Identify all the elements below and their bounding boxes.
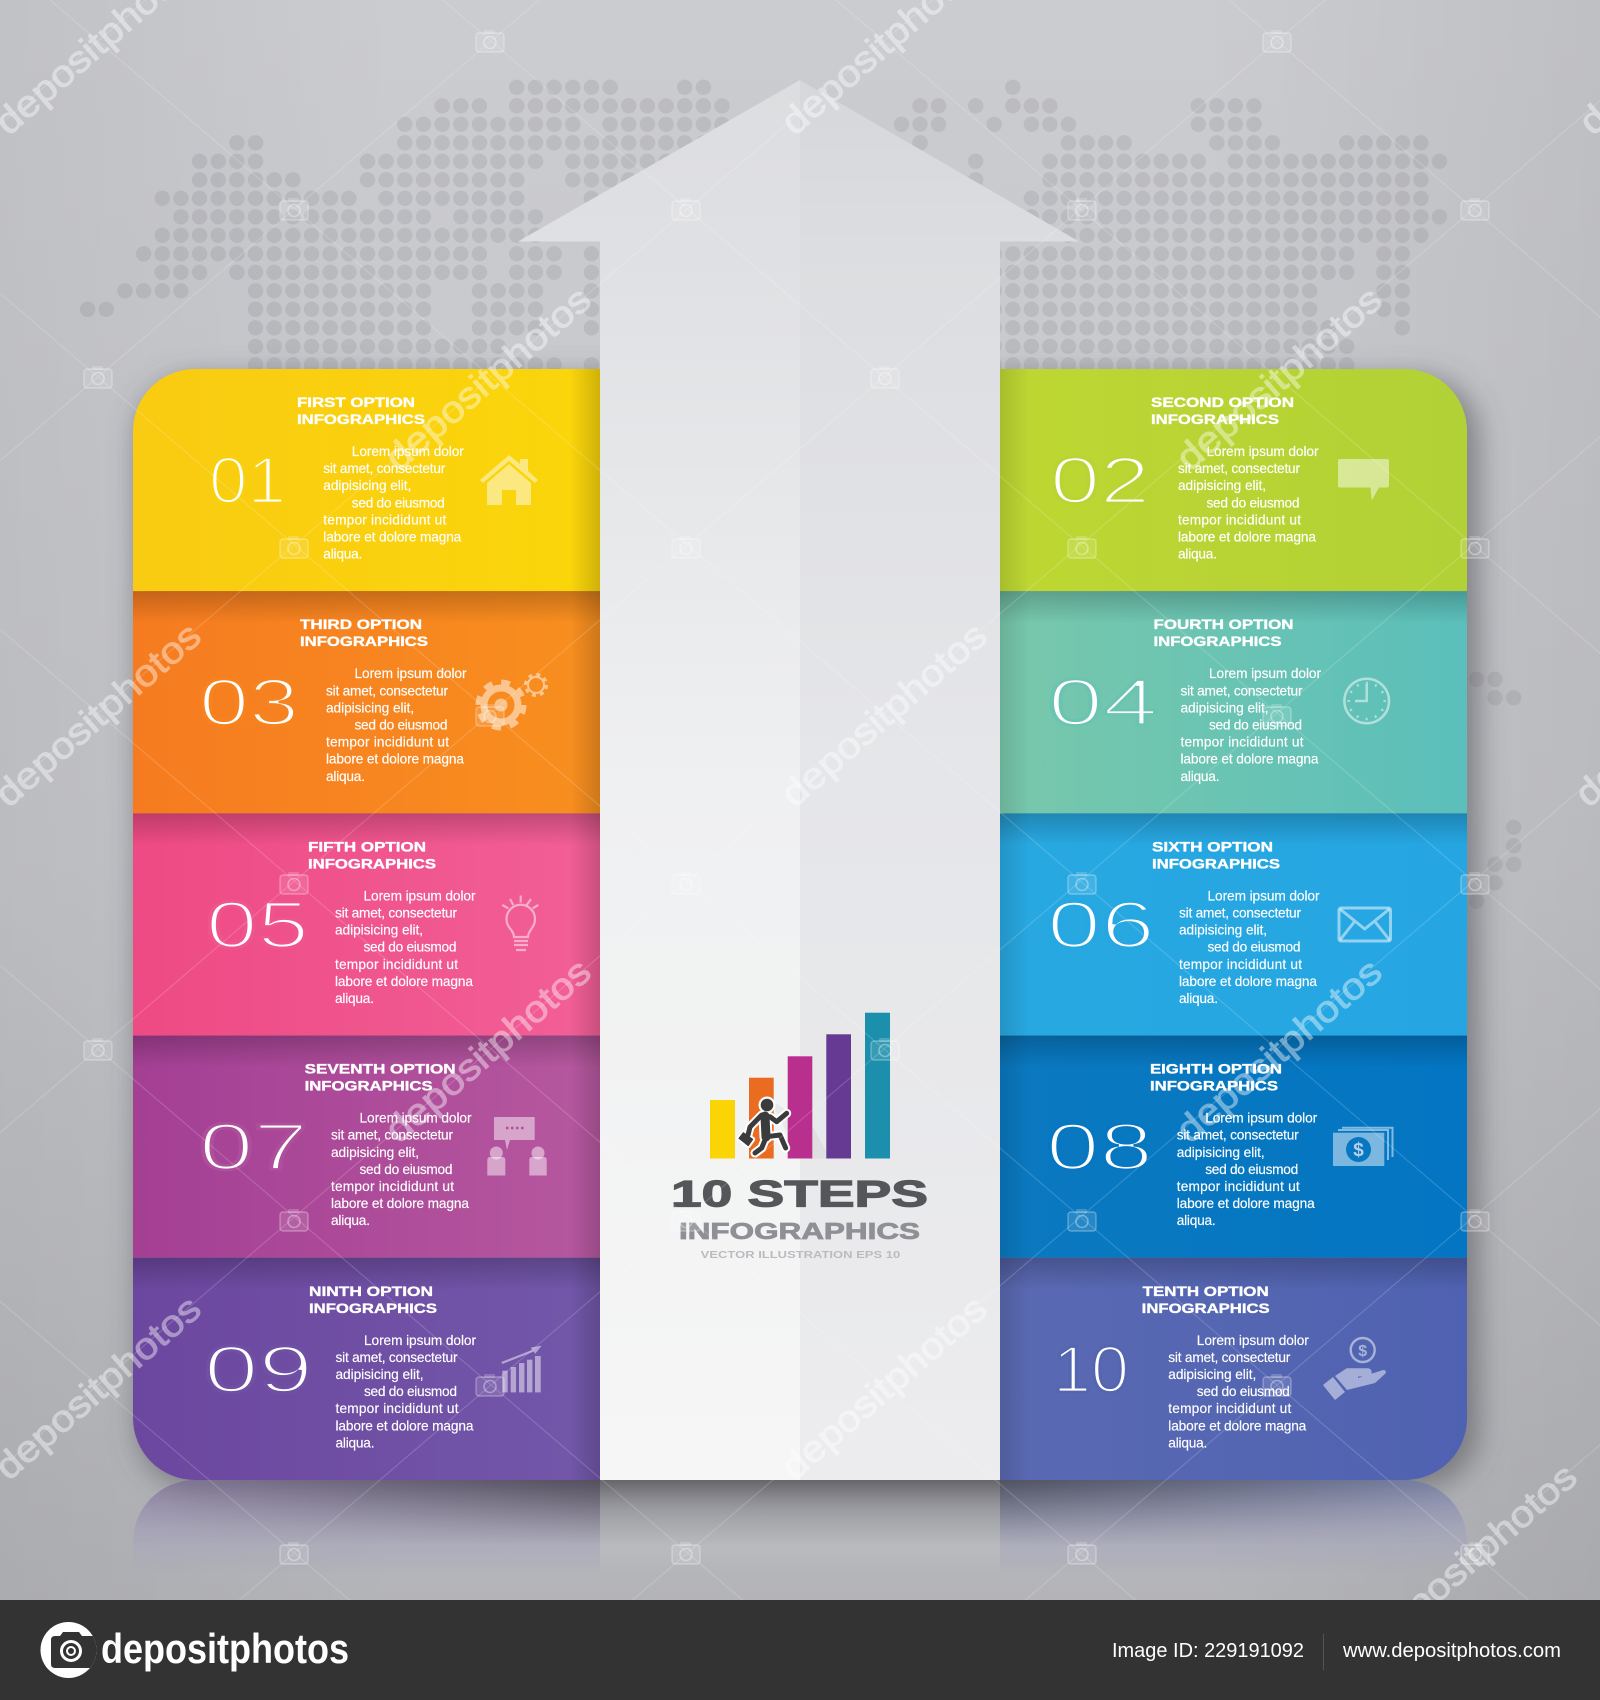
heading 05: INFOGRAPHICS bbox=[308, 856, 436, 871]
body 06: sit amet, consectetur bbox=[1179, 906, 1301, 920]
body 07 bbox=[331, 1111, 472, 1228]
body 02 bbox=[1178, 444, 1319, 562]
body 06: labore et dolore magna bbox=[1179, 974, 1317, 989]
number 07: 07 bbox=[199, 1110, 308, 1184]
body 10 bbox=[1168, 1333, 1309, 1450]
body 07: sit amet, consectetur bbox=[331, 1128, 453, 1143]
icon: banknotes: $ bbox=[1353, 1140, 1364, 1161]
body 02: sit amet, consectetur bbox=[1178, 461, 1300, 476]
body 10: adipisicing elit, bbox=[1168, 1367, 1256, 1382]
panel: option 03 bbox=[133, 591, 600, 813]
body 08: sit amet, consectetur bbox=[1177, 1128, 1299, 1143]
panel: option 08 bbox=[1000, 1036, 1467, 1258]
body 02: Lorem ipsum dolor bbox=[1206, 444, 1319, 459]
body 05: Lorem ipsum dolor bbox=[364, 888, 476, 903]
body 09: labore et dolore magna bbox=[336, 1418, 474, 1433]
body 10: sit amet, consectetur bbox=[1168, 1350, 1291, 1365]
watermark overlay: depositphotos bbox=[1168, 278, 1390, 479]
icon: gears bbox=[478, 674, 546, 728]
body 02: labore et dolore magna bbox=[1178, 530, 1316, 544]
number 06: 06 bbox=[1047, 887, 1155, 961]
footer bar bbox=[0, 1600, 1600, 1700]
body 03: sed do eiusmod bbox=[354, 718, 448, 732]
body 04: sed do eiusmod bbox=[1209, 718, 1302, 732]
body 02: adipisicing elit, bbox=[1178, 478, 1266, 493]
heading 04 bbox=[1154, 617, 1294, 649]
heading 09: INFOGRAPHICS bbox=[309, 1301, 437, 1316]
panel: option 01 bbox=[133, 369, 600, 591]
body 04: tempor incididunt ut bbox=[1180, 735, 1304, 750]
heading 01: INFOGRAPHICS bbox=[297, 412, 425, 427]
footer logo wordmark: depositphotos bbox=[101, 1625, 349, 1672]
heading 09: NINTH OPTION bbox=[309, 1284, 433, 1299]
body 08: aliqua. bbox=[1177, 1213, 1216, 1228]
body 04: sit amet, consectetur bbox=[1180, 683, 1303, 698]
body 06 bbox=[1179, 888, 1320, 1006]
body 02: tempor incididunt ut bbox=[1178, 512, 1301, 527]
heading 03: INFOGRAPHICS bbox=[300, 634, 428, 649]
body 03: Lorem ipsum dolor bbox=[354, 666, 467, 681]
icon: rising bar chart bbox=[501, 1346, 542, 1392]
icon: banknotes bbox=[1333, 1128, 1392, 1166]
body 07: tempor incididunt ut bbox=[331, 1179, 454, 1194]
body 02: aliqua. bbox=[1178, 547, 1217, 562]
watermark overlay: depositphotos bbox=[773, 1287, 995, 1488]
body 01: sed do eiusmod bbox=[352, 495, 445, 510]
body 03 bbox=[326, 666, 467, 784]
panel: option 02 bbox=[1000, 369, 1467, 591]
body 03: tempor incididunt ut bbox=[326, 735, 449, 750]
body 05 bbox=[335, 888, 476, 1006]
body 09: aliqua. bbox=[336, 1435, 374, 1450]
center logo: bar chart with runner bbox=[710, 1013, 890, 1158]
body 05: aliqua. bbox=[335, 991, 374, 1006]
number 09: 09 bbox=[204, 1332, 313, 1406]
icon: house bbox=[480, 455, 538, 505]
number 02: 02 bbox=[1050, 443, 1150, 517]
body 05: tempor incididunt ut bbox=[335, 957, 458, 972]
body 09: Lorem ipsum dolor bbox=[364, 1333, 476, 1348]
heading 05 bbox=[308, 839, 436, 871]
watermark overlay: depositphotos bbox=[773, 614, 995, 815]
body 05: sit amet, consectetur bbox=[335, 906, 457, 920]
body 05: sed do eiusmod bbox=[364, 940, 456, 955]
panel: option 04 bbox=[1000, 591, 1467, 813]
panel: option 05 bbox=[133, 813, 600, 1036]
icon: hand holding coin: $ bbox=[1358, 1343, 1367, 1360]
body 10: Lorem ipsum dolor bbox=[1197, 1333, 1309, 1348]
heading 10 bbox=[1142, 1284, 1270, 1316]
watermark overlay: depositphotos bbox=[377, 950, 599, 1151]
heading 03: THIRD OPTION bbox=[300, 617, 422, 632]
body 04: labore et dolore magna bbox=[1180, 752, 1319, 767]
icon: clock bbox=[1344, 679, 1389, 723]
watermark overlay: depositphotos bbox=[1168, 950, 1390, 1151]
heading 05: FIFTH OPTION bbox=[308, 839, 426, 854]
body 08: tempor incididunt ut bbox=[1177, 1179, 1300, 1194]
body 07: aliqua. bbox=[331, 1213, 370, 1228]
body 10: tempor incididunt ut bbox=[1168, 1401, 1291, 1416]
body 08: adipisicing elit, bbox=[1177, 1145, 1265, 1160]
body 03: aliqua. bbox=[326, 769, 365, 784]
heading 07: INFOGRAPHICS bbox=[305, 1079, 433, 1094]
heading 01: FIRST OPTION bbox=[297, 395, 415, 410]
heading 03 bbox=[300, 617, 428, 649]
icon: hand holding coin bbox=[1323, 1338, 1386, 1400]
body 09: sit amet, consectetur bbox=[336, 1350, 458, 1365]
body 03: sit amet, consectetur bbox=[326, 683, 448, 698]
heading 01 bbox=[297, 395, 425, 427]
heading 07 bbox=[305, 1062, 456, 1094]
dotted world map bbox=[88, 87, 1514, 901]
body 01: adipisicing elit, bbox=[323, 478, 411, 493]
body 08: labore et dolore magna bbox=[1177, 1196, 1315, 1211]
icon: two people talking bbox=[487, 1117, 547, 1176]
panel: option 10 bbox=[1000, 1258, 1467, 1480]
body 06: tempor incididunt ut bbox=[1179, 957, 1302, 972]
number 08: 08 bbox=[1046, 1110, 1153, 1184]
body 03: adipisicing elit, bbox=[326, 700, 414, 715]
body 02: sed do eiusmod bbox=[1206, 495, 1300, 510]
body 09 bbox=[336, 1333, 476, 1450]
body 07: sed do eiusmod bbox=[360, 1162, 452, 1177]
body 05: adipisicing elit, bbox=[335, 923, 423, 938]
watermark overlay: depositphotos bbox=[377, 278, 599, 479]
body 03: labore et dolore magna bbox=[326, 752, 464, 767]
body 09: adipisicing elit, bbox=[336, 1367, 424, 1382]
heading 07: SEVENTH OPTION bbox=[305, 1062, 456, 1077]
body 07: Lorem ipsum dolor bbox=[360, 1111, 472, 1126]
watermark overlay: depositphotos bbox=[1363, 1455, 1585, 1656]
website url: www.depositphotos.com bbox=[1342, 1639, 1561, 1662]
body 01: labore et dolore magna bbox=[323, 530, 462, 544]
center title: 10 STEPS: 10 STEPS bbox=[671, 1174, 928, 1215]
number 10: 10 bbox=[1053, 1332, 1129, 1406]
panel: option 09 bbox=[133, 1258, 600, 1480]
heading 08: INFOGRAPHICS bbox=[1150, 1079, 1278, 1094]
body 10: aliqua. bbox=[1168, 1435, 1207, 1450]
body 09: sed do eiusmod bbox=[364, 1384, 457, 1399]
center subtitle: INFOGRAPHICS: INFOGRAPHICS bbox=[679, 1218, 920, 1244]
panel drop shadow bbox=[137, 377, 1479, 1488]
icon: light bulb bbox=[502, 896, 538, 950]
image id: Image ID: 229191092 bbox=[1112, 1639, 1304, 1662]
bar chart bbox=[710, 1013, 890, 1158]
body 07: labore et dolore magna bbox=[331, 1196, 469, 1211]
number 01: 01 bbox=[209, 443, 286, 517]
heading 08 bbox=[1150, 1062, 1282, 1094]
body 05: labore et dolore magna bbox=[335, 974, 473, 989]
icon: speech bubble bbox=[1338, 459, 1389, 500]
heading 04: FOURTH OPTION bbox=[1154, 617, 1294, 632]
body 01: tempor incididunt ut bbox=[323, 512, 446, 527]
center caption: VECTOR ILLUSTRATION EPS 10 bbox=[701, 1250, 901, 1261]
floor reflection bbox=[134, 1480, 1466, 1547]
heading 10: INFOGRAPHICS bbox=[1142, 1301, 1270, 1316]
number 05: 05 bbox=[206, 887, 309, 961]
body 04: adipisicing elit, bbox=[1180, 700, 1268, 715]
number 03: 03 bbox=[199, 665, 299, 739]
body 01: aliqua. bbox=[323, 547, 362, 562]
heading 04: INFOGRAPHICS bbox=[1154, 634, 1282, 649]
body 08 bbox=[1177, 1111, 1318, 1228]
heading 10: TENTH OPTION bbox=[1143, 1284, 1269, 1299]
heading 02: SECOND OPTION bbox=[1151, 395, 1294, 410]
heading 02: INFOGRAPHICS bbox=[1151, 412, 1279, 427]
heading 09 bbox=[309, 1284, 437, 1316]
body 09: tempor incididunt ut bbox=[336, 1401, 459, 1416]
body 04 bbox=[1180, 666, 1321, 784]
body 06: adipisicing elit, bbox=[1179, 923, 1267, 938]
body 01 bbox=[323, 444, 464, 562]
body 01: Lorem ipsum dolor bbox=[352, 444, 464, 459]
body 08: Lorem ipsum dolor bbox=[1205, 1111, 1318, 1126]
body 04: aliqua. bbox=[1180, 769, 1220, 784]
body 06: aliqua. bbox=[1179, 991, 1218, 1006]
heading 02 bbox=[1151, 395, 1294, 427]
icon: envelope bbox=[1339, 908, 1390, 941]
central upward arrow bbox=[518, 80, 1079, 1480]
panel: option 06 bbox=[1000, 813, 1467, 1036]
body 01: sit amet, consectetur bbox=[323, 461, 446, 476]
body 06: sed do eiusmod bbox=[1208, 940, 1300, 955]
body 06: Lorem ipsum dolor bbox=[1208, 888, 1320, 903]
body 07: adipisicing elit, bbox=[331, 1145, 419, 1160]
heading 06 bbox=[1152, 839, 1280, 871]
heading 06: SIXTH OPTION bbox=[1152, 839, 1273, 854]
number 04: 04 bbox=[1048, 665, 1158, 739]
body 10: sed do eiusmod bbox=[1197, 1384, 1290, 1399]
body 04: Lorem ipsum dolor bbox=[1209, 666, 1321, 681]
icon: running businessman bbox=[739, 1098, 787, 1153]
panel: option 07 bbox=[133, 1036, 600, 1258]
footer logo icon: camera bbox=[40, 1622, 100, 1678]
body 10: labore et dolore magna bbox=[1168, 1418, 1307, 1433]
body 08: sed do eiusmod bbox=[1205, 1162, 1298, 1177]
heading 08: EIGHTH OPTION bbox=[1150, 1062, 1282, 1077]
heading 06: INFOGRAPHICS bbox=[1152, 856, 1280, 871]
